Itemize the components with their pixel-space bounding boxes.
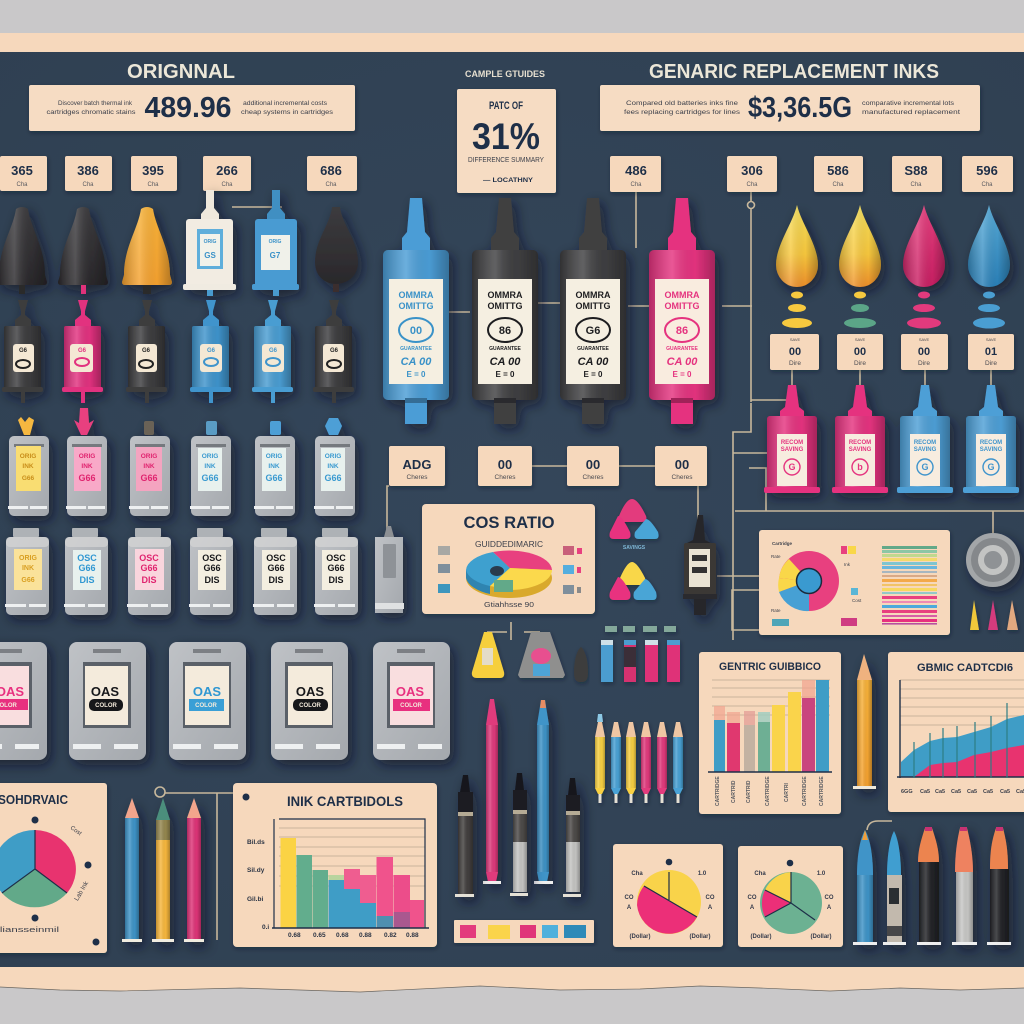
gray row B labels: G66 <box>267 563 285 573</box>
large cartridge label: black 1 <box>478 279 532 384</box>
icon: yellow triangle <box>472 632 504 678</box>
large cartridge label: black 1: OMITTG <box>488 301 522 311</box>
panel: generic price: comparative incremental lots <box>862 100 955 107</box>
panel: donut and stripe chart <box>759 530 950 635</box>
price tags: middle row: 00 <box>586 457 600 472</box>
price tags: drop row: 00 <box>789 346 801 358</box>
price tags: top row: Cha <box>832 182 844 188</box>
gray row A labels: G66 <box>140 473 158 483</box>
gray row B labels: DIS <box>328 575 344 585</box>
chart axis labels: 0.65 <box>313 932 326 939</box>
small cartridge labels: G6 <box>269 348 278 354</box>
gray row A labels: G66 <box>78 473 96 483</box>
rotated axis labels: CARTRIDGE <box>819 776 825 806</box>
gray row A labels: INK <box>22 463 34 470</box>
generic medium cartridge labels: RECOM <box>849 440 871 446</box>
price tags: top row: 395 <box>142 163 164 178</box>
pie one labels: CO <box>624 895 634 901</box>
panel: cost ratio: GUIDDEDIMARIC <box>475 540 543 549</box>
large cartridge label: black 1: E = 0 <box>496 370 515 379</box>
price tags: top row: Cha <box>147 182 159 188</box>
price tags: drop row: Dire <box>854 360 866 367</box>
large cartridge label: black 2 <box>566 279 620 384</box>
large cartridge label: black 1: 86 <box>499 325 511 337</box>
panel: bottom left pie <box>0 783 107 953</box>
generic medium cartridge labels: RECOM <box>980 440 1002 446</box>
icon: triangle cluster lower <box>610 562 657 600</box>
small coloured pencils <box>595 714 683 803</box>
area chart: Ca5 <box>983 789 993 795</box>
white bottle: ORIG <box>204 239 216 245</box>
price tags: top row: 486 <box>625 163 647 178</box>
pie markers <box>32 816 100 946</box>
gray row A labels <box>16 446 345 491</box>
large cartridge label: black 1: CA 00 <box>490 356 521 368</box>
black pen <box>917 827 941 945</box>
large cartridge label: magenta: OMITTG <box>664 301 700 311</box>
generic medium cartridge labels: SAVING <box>849 447 872 453</box>
pie one labels: CO <box>706 895 715 901</box>
marker three <box>563 778 581 897</box>
icon: round gear dial <box>966 533 1020 587</box>
price tags: top row: 586 <box>827 163 849 178</box>
price tags: drop row: 01 <box>985 346 997 358</box>
price tags: top row: S88 <box>904 163 928 178</box>
chart axis labels: 0.68 <box>288 932 301 939</box>
icon: gray triangle <box>518 632 565 678</box>
rotated axis labels: CARTRID <box>746 780 752 803</box>
gray row A labels: ORIG <box>202 453 218 460</box>
small cartridge labels: G6 <box>19 348 28 354</box>
pie one labels <box>624 859 715 940</box>
area chart: Ca5 <box>920 789 930 795</box>
panel: original price: cartridges chromatic stains <box>46 109 136 116</box>
marker: circle anchor <box>155 787 165 797</box>
generic medium cartridge labels: G <box>921 462 929 472</box>
gray row B labels: OSC <box>266 553 286 563</box>
pie one labels: (Dollar) <box>690 934 711 940</box>
gray row B labels: DIS <box>268 575 284 585</box>
price tags: top row: Cha <box>630 182 642 188</box>
panel: generic cartridges bar chart <box>699 652 841 814</box>
gray cartridge row C <box>0 642 450 760</box>
pie two labels: CO <box>824 895 834 901</box>
generic medium cartridge labels: RECOM <box>914 440 936 446</box>
stripe chart <box>882 546 937 625</box>
large cartridge label: black 1: GUARANTEE <box>489 346 521 352</box>
narrow gray cartridge <box>375 526 404 613</box>
panel: 31 percent callout <box>457 89 556 193</box>
3D pie chart <box>466 551 552 598</box>
price tags: top row <box>0 156 1013 192</box>
chart axis labels: 0.82 <box>384 932 397 939</box>
price tags: top row: Cha <box>910 182 922 188</box>
chart axis labels: 0.88 <box>359 932 372 939</box>
panel: generic cartridges area chart <box>888 652 1024 812</box>
panel: generic price: Compared old batteries inks fine <box>626 100 738 107</box>
drop puddle stacks <box>782 292 1005 328</box>
large cartridge label: black 2: OMMRA <box>576 290 611 300</box>
pie two labels: CO <box>748 895 757 901</box>
generic medium cartridge labels: G <box>987 462 995 472</box>
panel: pie chart one <box>613 844 723 947</box>
marker one <box>455 775 474 897</box>
generic medium cartridge labels: RECOM <box>781 440 803 446</box>
small cartridge labels: G6 <box>142 348 151 354</box>
marker two <box>510 773 528 896</box>
donut chart <box>778 551 839 611</box>
gray row C labels: OAS <box>193 684 221 699</box>
gray row B labels: OSC <box>139 553 159 563</box>
price tags: middle row: Cheres <box>407 474 428 481</box>
gray cartridge row A <box>8 408 355 516</box>
gray row C labels: OAS <box>91 684 119 699</box>
large cartridge label: cyan: CA 00 <box>401 356 432 368</box>
large cartridge label: cyan: 00 <box>410 325 422 337</box>
panel: ink cartridges chart <box>233 783 437 947</box>
price tags: middle row: 00 <box>498 457 512 472</box>
large cartridge label: magenta: OMMRA <box>664 290 700 300</box>
black and silver markers <box>455 773 581 897</box>
generic medium cartridges <box>764 385 1019 493</box>
price tags: drop row <box>770 334 1014 370</box>
price tags: middle row: 00 <box>675 457 689 472</box>
original ink row: funnels and bottles <box>0 190 358 296</box>
cluster caption: SAVINGS <box>623 545 646 551</box>
gray row A labels: ORIG <box>141 453 157 460</box>
small swatches and captions: Ink <box>844 562 851 567</box>
gray row A labels: INK <box>204 463 216 470</box>
panel: generic price <box>600 85 980 131</box>
panel: original price: additional incremental costs <box>243 100 328 107</box>
pie one labels: (Dollar) <box>630 934 651 940</box>
panel: cost ratio <box>422 504 595 614</box>
chart axis labels: Gil.bi <box>247 896 263 903</box>
chart axis labels: 0.68 <box>336 932 349 939</box>
heading: center caption: CAMPLE GTUIDES <box>465 69 545 79</box>
small swatches and captions: Rate <box>771 608 781 613</box>
gray row B labels <box>14 549 350 590</box>
large cartridge label: cyan: GUARANTEE <box>400 346 432 352</box>
large cartridge label: black 2: GUARANTEE <box>577 346 609 352</box>
area chart: Ca5 <box>967 789 977 795</box>
cost ratio title: COS RATIO <box>464 513 554 532</box>
rotated axis labels: CARTRID <box>731 780 737 803</box>
pie one labels: A <box>627 905 632 911</box>
area chart: Ca5 <box>935 789 945 795</box>
gray row A labels: ORIG <box>20 453 36 460</box>
tall orange pen <box>853 654 876 789</box>
panel: generic price: manufactured replacement <box>862 109 960 116</box>
small swatches and captions: Rate <box>771 554 781 559</box>
price tags: drop row: Dire <box>985 360 997 367</box>
generic price value: $3,36.5G <box>748 92 852 124</box>
price tags: top row: 365 <box>11 163 33 178</box>
price tags: top row: 266 <box>216 163 238 178</box>
area chart title: GBMIC CADTCDI6 <box>917 662 1013 674</box>
coloured pens bottom left <box>122 798 204 942</box>
price tags: top row: 386 <box>77 163 99 178</box>
gray row B labels: DIS <box>141 575 157 585</box>
gray row A labels: ORIG <box>325 453 341 460</box>
small swatches and captions <box>771 541 862 626</box>
tall pink and blue pens <box>483 699 553 884</box>
pie two <box>760 872 822 934</box>
icon: triangle cluster upper <box>610 499 659 539</box>
pie two labels: A <box>750 905 755 911</box>
rotated axis labels: CARTRIDGE <box>765 776 771 806</box>
gray row C labels: COLOR <box>299 703 321 709</box>
large cartridges: cyan, black, black, magenta <box>383 198 715 424</box>
gray row A labels: ORIG <box>79 453 95 460</box>
tall pens bottom right <box>853 827 1011 945</box>
small swatches and captions: Cost <box>852 598 862 603</box>
pie two labels: Cha <box>754 871 766 877</box>
large cartridge label: magenta <box>655 279 709 384</box>
price tags: drop row: 00 <box>918 346 930 358</box>
panel: 31 percent callout: DIFFERENCE SUMMARY <box>468 157 544 164</box>
gray row B labels: DIS <box>204 575 220 585</box>
gray row A labels: INK <box>143 463 155 470</box>
large cartridge label: black 2: E = 0 <box>584 370 603 379</box>
price tags: top row: Cha <box>746 182 758 188</box>
large cartridge label: cyan: E = 0 <box>407 370 426 379</box>
area chart: Ca5 <box>1000 789 1010 795</box>
connector lines <box>165 189 1024 940</box>
large cartridge label: cyan: OMITTG <box>398 301 434 311</box>
gray row C labels: OAS <box>396 684 424 699</box>
price tags: top row: 306 <box>741 163 763 178</box>
price tags: drop row: SAVE <box>790 337 801 342</box>
pie two labels: A <box>827 905 832 911</box>
blue and tan pen <box>883 831 906 945</box>
large cartridge label: black 1: OMMRA <box>488 290 523 300</box>
large cartridge label: cyan <box>389 279 443 384</box>
price tags: top row: Cha <box>325 182 337 188</box>
pie one labels: Cha <box>631 871 643 877</box>
area chart <box>897 680 1024 795</box>
gray row B labels: OSC <box>202 553 222 563</box>
heading: original: ORIGNNAL <box>127 61 235 83</box>
large cartridge label: black 2: G6 <box>586 325 600 337</box>
price tags: middle row: Cheres <box>672 474 693 481</box>
gray row C labels: OAS <box>296 684 324 699</box>
gray row B labels: G66 <box>140 563 158 573</box>
gray row A labels: INK <box>327 463 339 470</box>
chart axis labels: 0.i <box>262 924 269 931</box>
white bottle <box>183 190 236 296</box>
rotated axis labels: CARTRIDGE <box>802 776 808 806</box>
panel: 31 percent callout: — LOCATHNY <box>483 177 534 184</box>
price tags: middle row: Cheres <box>583 474 604 481</box>
generic medium cartridge labels: SAVING <box>914 447 937 453</box>
price tags: drop row: SAVE <box>986 337 997 342</box>
price tags: top row: 596 <box>976 163 998 178</box>
price tags: drop row: SAVE <box>855 337 866 342</box>
large cartridge label: magenta: 86 <box>676 325 688 337</box>
generic medium cartridge labels: G <box>788 462 796 472</box>
pie two labels: 1.0 <box>817 871 826 877</box>
gray row B labels: G66 <box>78 563 96 573</box>
pie two labels: (Dollar) <box>750 934 772 940</box>
gray row C labels: COLOR <box>95 703 117 709</box>
percent value: 31% <box>472 116 540 157</box>
gray row C labels <box>0 666 433 725</box>
panel: generic price: fees replacing cartridges for lines <box>624 109 741 116</box>
small swatches and captions: Cartridge <box>772 541 793 546</box>
price tags: drop row: Dire <box>789 360 801 367</box>
area chart: Ca5 <box>951 789 961 795</box>
blue bottle <box>252 190 299 296</box>
large cartridge label: magenta: CA 00 <box>667 356 698 368</box>
rotated axis labels: CARTRIDGE <box>715 776 721 806</box>
gray row C labels: COLOR <box>195 703 217 709</box>
price tags: drop row: Dire <box>918 360 930 367</box>
icon: dark pill <box>574 647 588 682</box>
price tags: middle row: Cheres <box>495 474 516 481</box>
large cartridge label: black 2: CA 00 <box>578 356 609 368</box>
cost ratio legends <box>438 546 582 594</box>
panel: original price <box>29 85 355 131</box>
large cartridge label: magenta: E = 0 <box>673 370 692 379</box>
gray row A labels: G66 <box>324 473 342 483</box>
bar chart title: GENTRIC GUIBBICO <box>719 661 821 673</box>
panel: bottom left pie: Cost <box>69 825 83 837</box>
generic ink drops <box>776 205 1010 287</box>
large cartridge label: black 2: OMITTG <box>576 301 610 311</box>
white bottle: GS <box>204 251 216 260</box>
original small cartridges row <box>2 300 354 403</box>
original price value: 489.96 <box>144 92 232 124</box>
gray row A labels: INK <box>81 463 93 470</box>
price tags: top row: Cha <box>221 182 233 188</box>
rotated axis labels <box>715 776 825 806</box>
generic medium cartridge labels: SAVING <box>781 447 804 453</box>
panel: original price: cheap systems in cartridges <box>241 109 334 116</box>
gray row B labels: INK <box>22 565 34 572</box>
generic medium cartridge labels: SAVING <box>980 447 1003 453</box>
price tags: top row: 686 <box>320 163 342 178</box>
colour swatch strip <box>454 920 594 943</box>
panel: pie chart two <box>738 846 843 947</box>
small cartridge labels: G6 <box>207 348 216 354</box>
gray row A labels: G66 <box>22 475 35 482</box>
price tags: top row: Cha <box>981 182 993 188</box>
blue bottle: G7 <box>270 251 281 260</box>
chart axis labels: Bil.ds <box>247 839 265 846</box>
generic medium cartridge labels: b <box>857 462 863 472</box>
rotated axis labels: CARTRI <box>784 783 790 802</box>
gray row C labels: COLOR <box>400 703 422 709</box>
chart title: INIK CARTBIDOLS <box>287 793 403 809</box>
price tags: drop row: SAVE <box>919 337 930 342</box>
pie chart <box>0 830 76 907</box>
gray cartridge row B <box>5 528 358 615</box>
price tags: drop row: 00 <box>854 346 866 358</box>
gray row A labels: G66 <box>265 473 283 483</box>
gray row B labels: OSC <box>326 553 346 563</box>
blue bottle: ORIG <box>269 239 281 245</box>
area chart: 6GG <box>901 789 913 795</box>
bar chart <box>708 680 832 772</box>
small cartridge labels: G6 <box>330 348 339 354</box>
chart axis labels: 0.88 <box>406 932 419 939</box>
pie one labels: A <box>708 905 713 911</box>
chart axis labels: Sil.dy <box>247 867 265 874</box>
gray row B labels: G66 <box>327 563 345 573</box>
blue pen <box>853 830 877 945</box>
panel: original price: Discover batch thermal ink <box>58 100 133 107</box>
gray row B labels: ORIG <box>19 555 37 562</box>
silver pen <box>952 827 977 945</box>
price tags: middle row <box>389 446 707 486</box>
black pen with orange tip <box>987 827 1011 945</box>
large cartridge label: cyan: OMMRA <box>398 290 434 300</box>
dark cartridge <box>683 515 717 615</box>
small cartridge labels: G6 <box>78 348 87 354</box>
small crayons right <box>970 600 1018 630</box>
panel: bottom left pie: Lab Ink <box>73 880 90 902</box>
gray row B labels: G66 <box>21 577 35 584</box>
chart axis labels <box>247 839 419 939</box>
large cartridge label: magenta: GUARANTEE <box>666 346 698 352</box>
pie title: SOHDRVAIC <box>0 792 69 807</box>
gray row A labels: G66 <box>201 473 219 483</box>
pie one <box>637 870 701 934</box>
gray row B labels: OSC <box>77 553 97 563</box>
small vials <box>601 626 680 682</box>
gray row B labels: G66 <box>203 563 221 573</box>
pie one labels: 1.0 <box>698 871 707 877</box>
panel: 31 percent callout: PATC OF <box>489 100 523 112</box>
gray row B labels: DIS <box>79 575 95 585</box>
small cartridge labels <box>13 344 344 372</box>
panel: cost ratio: Gtiahhsse 90 <box>484 600 534 609</box>
pie two labels <box>748 860 834 940</box>
gray row A labels: INK <box>268 463 280 470</box>
dark drop <box>315 207 358 284</box>
stacked bar chart <box>272 819 429 928</box>
pie two labels: (Dollar) <box>810 934 832 940</box>
price tags: top row: Cha <box>16 182 28 188</box>
heading: generic replacement inks: GENARIC REPLACEMENT INKS <box>649 61 939 83</box>
generic medium cartridge labels <box>777 434 1006 486</box>
price tags: middle row: ADG <box>403 457 431 472</box>
price tags: top row: Cha <box>82 182 94 188</box>
gray row A labels: ORIG <box>266 453 282 460</box>
